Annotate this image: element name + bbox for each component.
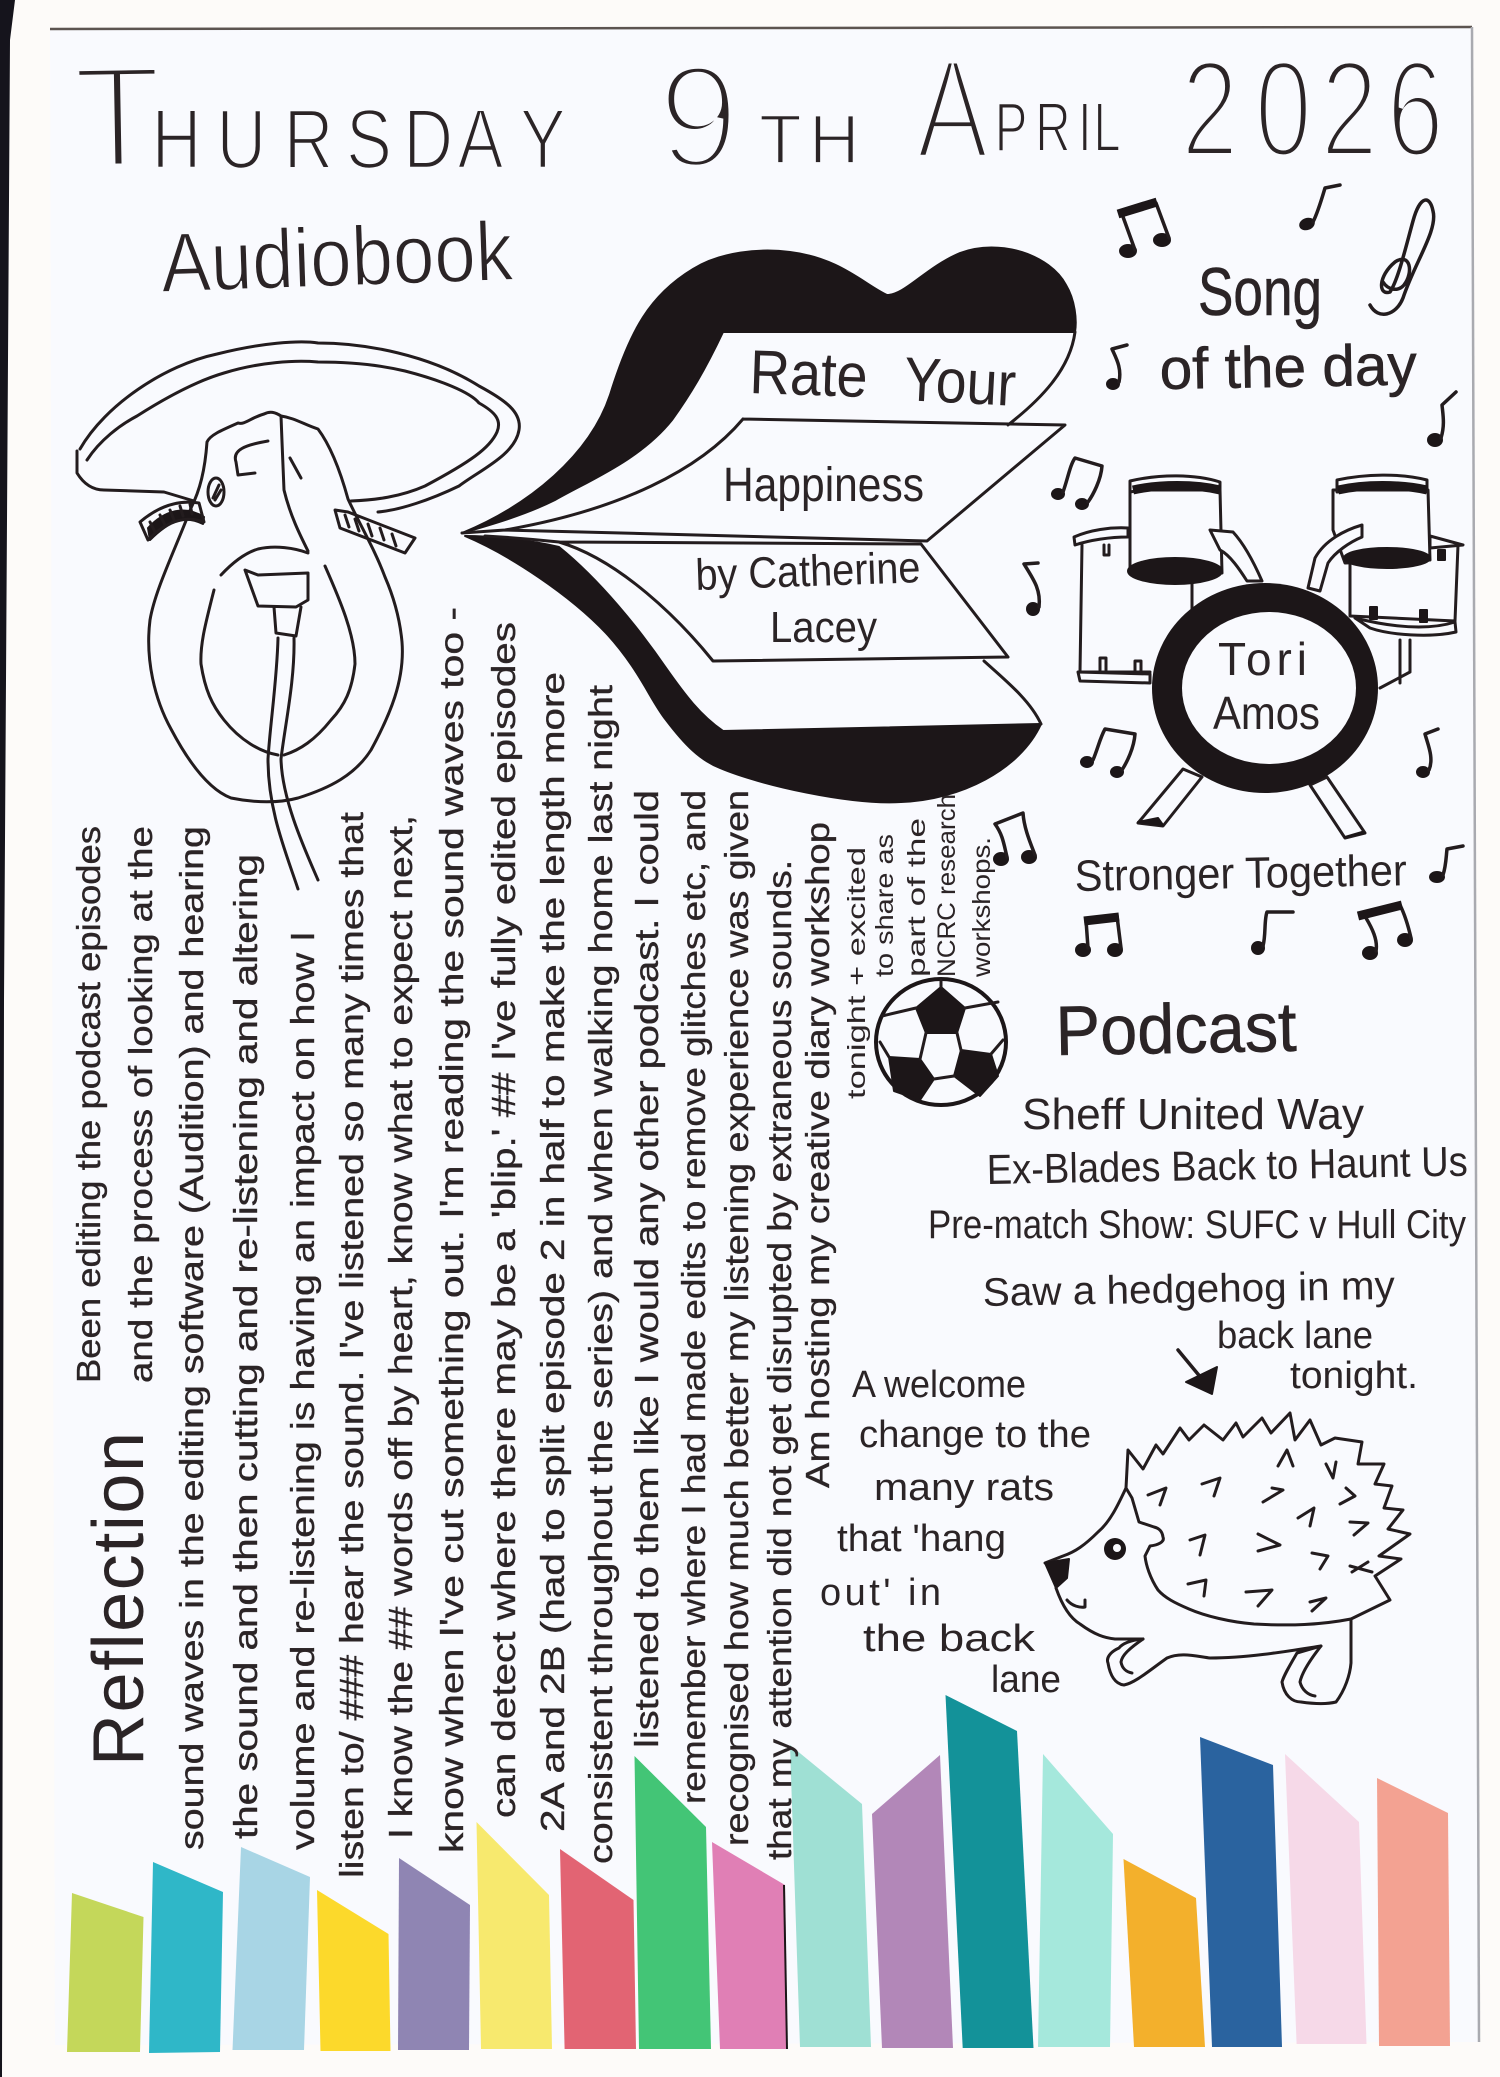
text block: podcast episodes: Sheff United Way (1022, 1090, 1364, 1139)
text block: reflection body: recognised how much better my listening experience was given (718, 790, 755, 1846)
drum label: Tori Amos (1213, 633, 1320, 739)
text block: hedgehog note: Saw a hedgehog in my (982, 1264, 1395, 1315)
book author: Lacey (770, 603, 877, 652)
icon: football (876, 979, 1006, 1105)
text block: hedgehog note: tonight. (1290, 1355, 1418, 1397)
text block: workshop note: NCRC research (933, 794, 961, 977)
text block: reflection body: listened to them like I would any other podcast. I could (628, 790, 665, 1748)
drum label: Tori Amos: Amos (1213, 687, 1320, 739)
text block: workshop note (843, 794, 996, 1099)
text block: reflection body: Been editing the podcast episodes (70, 826, 107, 1383)
arrow (1178, 1350, 1217, 1394)
text block: rats note: lane (991, 1659, 1061, 1701)
title: 2026 (1181, 32, 1444, 185)
text block: rats note: many rats (874, 1467, 1054, 1509)
text block: rats note: A welcome (852, 1364, 1026, 1406)
text block: reflection body: can detect where there may be a 'blip.' ## I've fully edited episodes (485, 622, 522, 1818)
text block: reflection body: remember where I had made edits to remove glitches etc, and (675, 790, 712, 1804)
title: T (72, 34, 164, 199)
title: PRIL (995, 87, 1121, 166)
book title: Rate Your: Your (902, 345, 1018, 420)
text block: workshop note: part of the (903, 818, 931, 977)
text block: workshop note: tonight + excited (843, 847, 871, 1099)
text block: rats note (820, 1364, 1091, 1701)
song title: Stronger Together (1074, 846, 1407, 901)
heading: Song of the day (1159, 254, 1417, 402)
text block: reflection body: consistent throughout the series) and when walking home last night (582, 685, 619, 1864)
text block: podcast episodes (928, 1090, 1468, 1247)
icon: treble clef (1370, 200, 1434, 314)
title: 9 (658, 35, 739, 198)
text block: hedgehog note (982, 1264, 1418, 1397)
heading: Song of the day: Song (1198, 254, 1322, 330)
title: HURSDAY (152, 93, 566, 187)
icons: music notes (994, 185, 1463, 959)
title: A (917, 30, 989, 188)
text block: reflection body: sound waves in the editing software (Audition) and hearing (173, 826, 210, 1850)
text block: rats note: that 'hang (837, 1518, 1006, 1560)
book author: by Catherine (695, 543, 921, 600)
book title: Happiness: Happiness (723, 459, 924, 512)
drum label: Tori Amos: Tori (1218, 633, 1307, 685)
title (72, 30, 1444, 199)
icon: oxygen mask with tube (77, 342, 519, 889)
heading: Podcast: Podcast (1055, 988, 1297, 1070)
title: TH (759, 100, 860, 178)
colour paper strips (67, 1695, 1450, 2053)
heading: Audiobook: Audiobook (159, 204, 515, 310)
text block: reflection body: 2A and 2B (had to split episode 2 in half to make the length more (534, 672, 571, 1832)
book author (695, 543, 921, 652)
text block: reflection body: I know the ## words off by heart, know what to expect next, (382, 815, 419, 1839)
text block: reflection body: listen to/ ### hear the sound. I've listened so many times that (333, 812, 370, 1878)
icon: open book (462, 247, 1076, 802)
icon: drum kit (1074, 475, 1463, 838)
text block: reflection body (70, 607, 836, 1878)
heading: Reflection: Reflection (79, 1432, 159, 1766)
book title: Rate Your: Rate (749, 338, 869, 411)
heading: Song of the day: of the day (1159, 333, 1417, 402)
text block: workshop note: to share as (871, 834, 899, 977)
text block: reflection body: volume and re-listening is having an impact on how I (284, 931, 321, 1850)
book title: Rate Your (749, 338, 1018, 420)
text block: reflection body: the sound and then cutting and re-listening and altering (227, 854, 264, 1839)
text block: reflection body: and the process of looking at the (122, 826, 159, 1383)
text block: reflection body: Am hosting my creative diary workshop (799, 822, 836, 1488)
icon: hedgehog (1045, 1413, 1410, 1704)
text block: rats note: change to the (859, 1414, 1091, 1456)
text block: workshop note: workshops. (968, 837, 996, 978)
text block: reflection body: know when I've cut something out. I'm reading the sound waves too - (433, 607, 470, 1853)
text block: rats note: the back (863, 1618, 1036, 1660)
text block: reflection body: that my attention did not get disrupted by extraneous sounds. (761, 860, 798, 1860)
text block: hedgehog note: back lane (1217, 1315, 1373, 1357)
text block: rats note: out' in (820, 1572, 941, 1614)
